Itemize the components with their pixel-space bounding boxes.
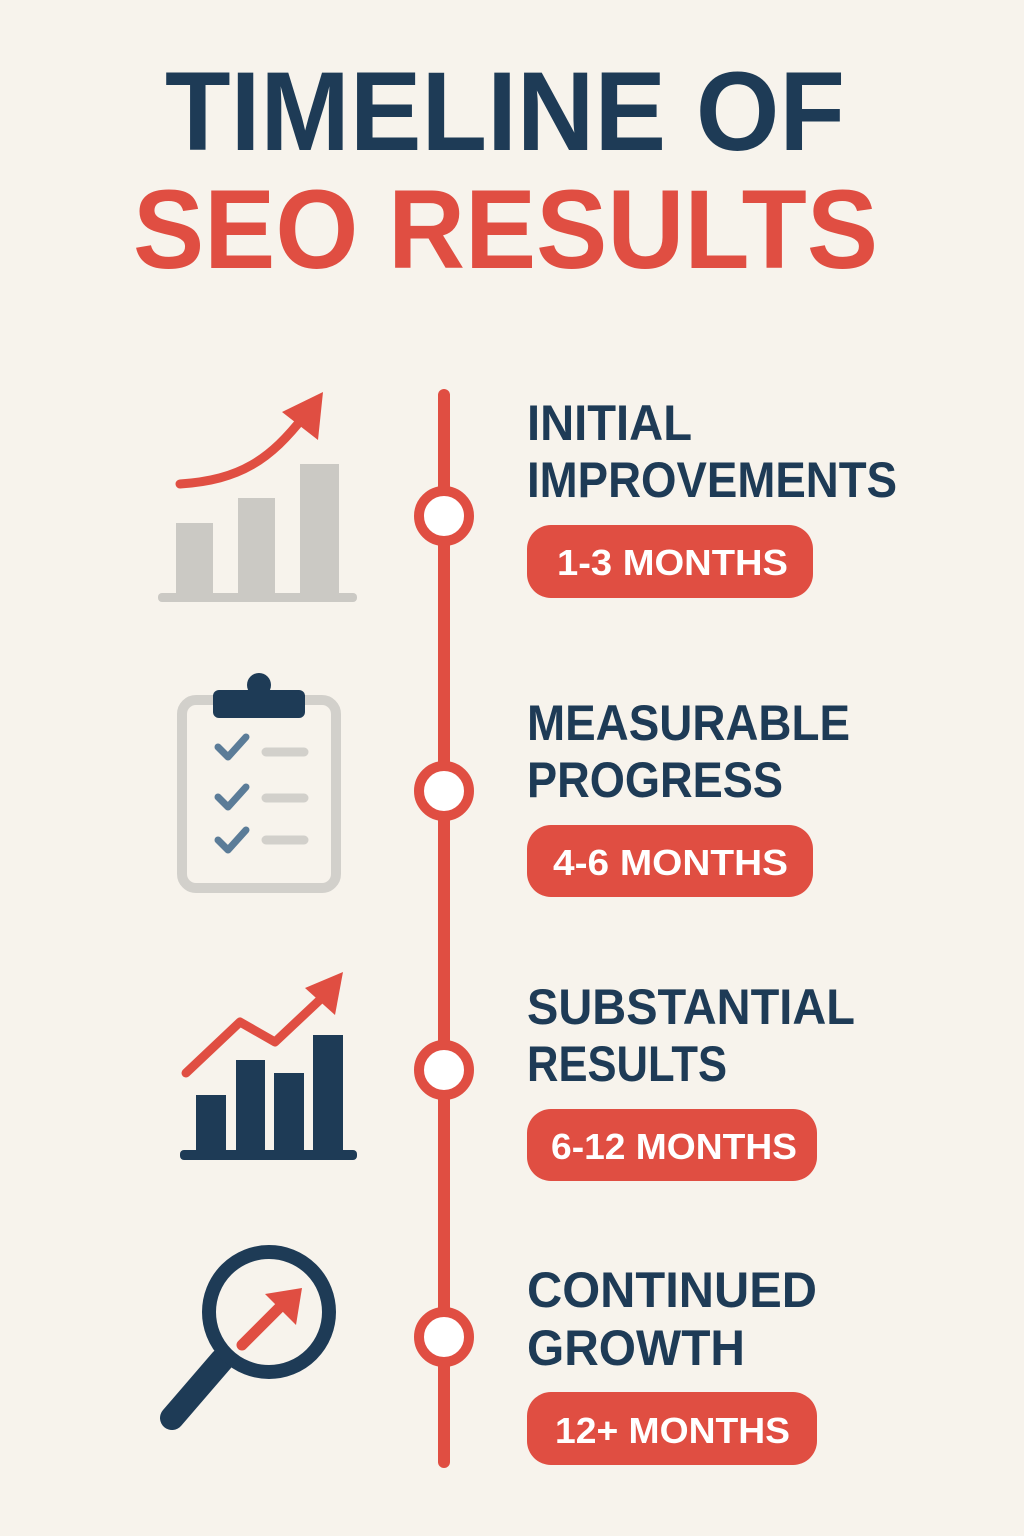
- pill: 4-6 months: [527, 825, 813, 897]
- timeline line: [438, 395, 450, 1462]
- pill: 1-3 months: [527, 525, 813, 598]
- heading 3: [527, 979, 855, 1092]
- title: TIMELINE OF: [165, 49, 845, 174]
- icon: clipboard checklist: [182, 673, 336, 888]
- pill: 4-6 months: 4-6 MONTHS: [553, 842, 788, 883]
- heading 1: [527, 395, 897, 508]
- heading 2: PROGRESS: [527, 752, 783, 808]
- pill: 12+ months: 12+ MONTHS: [555, 1410, 790, 1451]
- pill: 12+ months: [527, 1392, 817, 1465]
- heading 3: RESULTS: [527, 1036, 727, 1092]
- timeline node 2: [419, 766, 469, 816]
- heading 3: SUBSTANTIAL: [527, 979, 855, 1035]
- heading 1: IMPROVEMENTS: [527, 452, 897, 508]
- icon: dark bar chart with arrow: [180, 972, 357, 1160]
- heading 2: [527, 695, 850, 808]
- pill: 6-12 months: 6-12 MONTHS: [551, 1126, 797, 1167]
- timeline node 4: [419, 1312, 469, 1362]
- heading 2: MEASURABLE: [527, 695, 850, 751]
- heading 4: [527, 1262, 817, 1376]
- heading 4: GROWTH: [527, 1320, 745, 1376]
- heading 1: INITIAL: [527, 395, 692, 451]
- timeline node 3: [419, 1045, 469, 1095]
- timeline node 1: [419, 491, 469, 541]
- pill: 1-3 months: 1-3 MONTHS: [557, 542, 788, 583]
- pill: 6-12 months: [527, 1109, 817, 1181]
- title: SEO RESULTS: [133, 167, 878, 292]
- heading 4: CONTINUED: [527, 1262, 817, 1318]
- icon: magnifier with arrow: [172, 1252, 329, 1418]
- icon: bar chart with rising arrow: [158, 392, 357, 602]
- title: [133, 49, 878, 292]
